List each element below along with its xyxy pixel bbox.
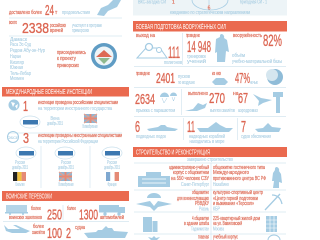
stat: 67 airfields <box>233 90 258 114</box>
stat: 2401 launches: пусков <box>178 74 190 80</box>
text: apartment house: Москва <box>213 226 224 232</box>
stat: 7 support ships: судов обеспечения <box>241 134 271 140</box>
text: date: Россия <box>15 160 25 166</box>
text: sports centre: «Центр горной подготовки <box>213 195 258 202</box>
text: admin building: корпус с общежитием <box>173 170 209 176</box>
stat: 82%: учебно-материальной базы <box>232 58 282 65</box>
flag: France <box>106 172 119 181</box>
icon: wings <box>148 236 160 240</box>
text: joined project <box>57 50 86 69</box>
heading: combat training: БОЕВАЯ ПОДГОТОВКА ВООРУЖЁННЫХ СИЛ <box>136 23 226 31</box>
icon: OSCE badge: ОБСЕ <box>7 135 19 140</box>
icon: train <box>5 205 28 215</box>
icon: submarine <box>147 125 178 131</box>
stat: 11 ships: надводных кораблей <box>189 133 225 140</box>
text: airborne hostel: РВВДКУ <box>195 201 210 207</box>
panel: military transport <box>3 205 129 240</box>
text: sports centre: и выживания «Терскол» <box>213 201 254 207</box>
text: range trips: выход на <box>136 33 155 39</box>
text: date: декабрь 2015 <box>58 165 74 171</box>
text: date: декабрь 2015 <box>47 121 63 127</box>
stat: 67 airfields: аэродромах <box>238 108 258 114</box>
panel: strategic band <box>133 0 287 16</box>
text: inspection description <box>38 99 118 112</box>
text: hostel: противоминного центра ВС РФ <box>213 176 266 182</box>
icon: emblem <box>91 43 117 69</box>
stat: doctors: российских <box>50 22 66 29</box>
icon: map fragment <box>97 0 121 16</box>
text: hostel <box>213 165 266 188</box>
text: joined project: присоединились <box>57 50 86 56</box>
stat: 2401 launches: по воздушно <box>178 80 195 86</box>
icon: ice axe <box>265 194 282 210</box>
stat: doctors: 2338 <box>22 20 49 37</box>
heading: international inspections <box>2 87 129 96</box>
stat: planes <box>32 224 62 240</box>
text: airborne hostel: Рязань <box>199 206 209 212</box>
icon: arc: 6 <box>208 6 211 12</box>
text: sports centre: КБР <box>213 206 220 212</box>
icon: warship <box>197 122 233 132</box>
list of cities: Кизляр <box>10 60 24 66</box>
heading: military transport <box>2 191 129 201</box>
text: date <box>12 160 28 171</box>
stat: trucks: более <box>67 206 76 212</box>
stat: doctors: всего <box>9 20 17 26</box>
list of cities: Редом Абу-эн-Нур <box>10 48 45 54</box>
text: four hostels: 4 общежития <box>192 216 209 222</box>
stat: trains: 250 <box>47 206 62 224</box>
stat: 82%: вооружённость <box>233 33 262 39</box>
icon: deminer <box>272 167 282 188</box>
stat: 47%: 47% <box>235 70 250 87</box>
text: airborne hostel: общежитие <box>192 190 209 196</box>
stat: 14948 exercises: тренировок <box>187 54 207 60</box>
heading: construction <box>133 147 287 157</box>
text: inspection description: инспекции проведены иностранными специалистами <box>38 133 122 139</box>
stat: 47%: ночью <box>250 80 258 86</box>
stat: food delivered <box>9 2 90 19</box>
list of cities: Наран <box>10 54 21 60</box>
text: four hostels <box>184 216 209 232</box>
flag: Belgium <box>13 172 26 181</box>
text: inspection description <box>38 133 122 145</box>
stat: 6 submarines <box>135 119 167 140</box>
stat: ships <box>66 225 85 240</box>
stat: 6 submarines: подводных лодок <box>136 134 167 140</box>
text: four hostels: Таджикистан <box>191 226 209 232</box>
heading: construction: СТРОИТЕЛЬСТВО И РЕКОНСТРУКЦИЯ <box>136 150 210 156</box>
text: admin building: на 550 человек СЗУ <box>171 176 210 182</box>
stat: 82%: 82% <box>263 31 282 50</box>
icon: building block <box>143 217 158 232</box>
icon: truck <box>99 205 125 216</box>
stat: trucks: 1300 <box>79 206 98 224</box>
text: date <box>47 116 63 127</box>
text: inspection description: на территории Российской Федерации <box>38 138 98 145</box>
icon: jet and tower <box>253 92 283 113</box>
text: four hostels: в здании штаба <box>184 221 209 227</box>
panel: combat training <box>134 31 286 145</box>
text: joined project: приморских <box>57 63 79 69</box>
stat: food delivered: продовольствия <box>62 10 90 16</box>
text: hostel: Международного <box>213 170 249 176</box>
text: directions: ежедневно по стратегическим направлениям <box>170 10 250 16</box>
list of cities: Дамаск <box>10 37 28 43</box>
panel: humanitarian aid <box>9 0 122 82</box>
stat: 11 ships <box>187 119 225 140</box>
text: at sea: находились в море <box>190 139 225 145</box>
stat: 67 airfields: на <box>233 91 239 97</box>
text: admin building: Санкт-Петербург <box>181 182 209 188</box>
heading: military transport: ВОИНСКИЕ ПЕРЕВОЗКИ <box>6 194 52 200</box>
stat: food delivered: 24 <box>45 2 54 19</box>
stat: 270 sorties <box>188 90 235 114</box>
text: joined project: к проекту <box>57 56 76 62</box>
panel: inspections abroad <box>8 98 118 130</box>
text: inspection description: на территории иностранного государства <box>38 106 112 112</box>
panel: inspections in Russia <box>7 130 122 188</box>
labels: countries <box>16 182 117 188</box>
list of cities: Мехмен <box>10 76 24 82</box>
list of cities <box>10 37 45 82</box>
icon: soldier <box>215 34 229 62</box>
stat: 111 ranges: 111 <box>168 43 180 62</box>
labels: countries: Бельгия <box>16 182 25 188</box>
stat: 2634 jumps: 2634 <box>135 91 155 108</box>
stat: 2401 launches: проведено <box>136 71 150 77</box>
icon: jet <box>185 103 207 111</box>
icon: parachutes <box>160 92 177 103</box>
flag: UK <box>84 114 97 123</box>
icon: building <box>138 172 170 187</box>
icon: tank <box>212 71 228 85</box>
number: 3: 3 <box>23 130 29 147</box>
text: completed: завершено строительство <box>187 157 233 163</box>
text: apartment house: 225-квартирный жилой дом <box>213 215 260 222</box>
text: sports centre <box>213 189 263 212</box>
panel: inspections abroad: Великобритания <box>82 124 98 130</box>
stat: doctors: участвуют в програме <box>72 23 102 29</box>
icon: OSCE <box>55 147 75 159</box>
stat: 2634 jumps <box>135 91 175 114</box>
text: airborne hostel <box>177 190 210 212</box>
number: 1: 1 <box>23 98 28 115</box>
stat: 14948 exercises: учений <box>187 58 206 65</box>
text: date: Россия <box>61 160 71 166</box>
text: admin building <box>169 164 210 188</box>
text: date: декабрь 2015 <box>104 165 120 171</box>
heading: combat training <box>133 21 287 32</box>
text: apartment house <box>213 215 260 232</box>
icon: bottom arc <box>268 235 280 240</box>
stat: ships: судна <box>75 225 85 231</box>
text: inspection description: инспекция проведена российскими специалистами <box>38 99 118 106</box>
stat: 14948 exercises: проведено <box>186 33 200 39</box>
stat: 14948 exercises <box>186 33 211 65</box>
text: apartment house: на ул. Вавиловский <box>213 220 242 227</box>
text: date: Вена <box>50 116 60 122</box>
heading: international inspections: МЕЖДУНАРОДНЫЕ ВОЕННЫЕ ИНСПЕКЦИИ <box>6 89 92 96</box>
icon: ship <box>84 226 128 238</box>
stat: trucks <box>67 206 124 224</box>
labels: countries: Великобритания <box>58 182 74 188</box>
panel: construction <box>134 157 286 240</box>
stat: 111 ranges <box>164 43 182 66</box>
stat: doctors <box>9 20 102 37</box>
text: admin building: административно-учебный <box>169 164 209 171</box>
stat: 2401 launches <box>136 70 195 87</box>
icon: apartment house <box>266 216 277 232</box>
icon: OSCE <box>20 116 40 128</box>
text: date: декабрь 2015 <box>12 165 28 171</box>
text: hostel: Нахабино <box>213 182 229 188</box>
stat: trains <box>9 206 62 224</box>
stat: 7 support ships <box>241 119 271 140</box>
stat: 82% <box>232 31 282 65</box>
stat: 2401 launches: 2401 <box>156 70 175 87</box>
flag: UK <box>59 172 72 181</box>
stat: 270 sorties: вылетов самолётов <box>210 108 235 114</box>
stat: trucks: автомобилей <box>100 214 124 221</box>
stat: trains: более <box>31 206 41 212</box>
stat: 270 sorties: выполнено <box>188 91 208 97</box>
icon: support ship <box>255 123 281 132</box>
stat: planes: самолётов <box>32 230 45 236</box>
text: date <box>104 160 120 171</box>
stat: planes: более <box>33 224 44 230</box>
icon: map pins <box>137 44 167 58</box>
text: hostel: общежитие гостиничного типа <box>213 165 265 171</box>
icon: globe <box>8 100 20 110</box>
panel: combat training: 14 948 <box>187 39 211 56</box>
stat: 82%: объём <box>232 53 245 59</box>
stat: food delivered: доставлено более <box>9 10 42 16</box>
icon: OSCE <box>102 147 122 159</box>
stat: 2634 jumps: прыжка с парашютом <box>136 108 175 114</box>
icon: night circle <box>266 69 283 85</box>
stat: food delivered: т <box>55 10 58 16</box>
stat: 111 ranges: полигонов <box>164 60 182 66</box>
icon: tank: из них <box>212 71 221 77</box>
stat: 11 ships: 11 <box>187 119 195 136</box>
stat: 7 support ships: 7 <box>241 119 246 136</box>
stat: trains: воинских эшелонов <box>9 215 42 221</box>
list of cities: Тель-Лебар <box>10 71 31 77</box>
text: sports centre: культурно-спортивный центр <box>213 189 263 196</box>
list of cities: Южная <box>10 65 23 71</box>
icon: cargo plane <box>4 225 30 233</box>
text: airborne hostel: для военнослужащих <box>177 196 209 202</box>
icon: arc <box>192 0 228 12</box>
stat: doctors: врачей <box>50 27 63 34</box>
stat: 6 submarines: 6 <box>135 119 140 136</box>
stat: 67 airfields: 67 <box>238 90 248 107</box>
text: date: Россия <box>107 160 117 166</box>
panel: inspections in Russia: Франция <box>108 182 117 188</box>
stat: 270 sorties: 270 <box>209 90 225 107</box>
list of cities: Раса Эс-Суд <box>10 42 31 48</box>
icon: OSCE <box>16 147 36 159</box>
text: date <box>58 160 74 171</box>
stat: doctors: приморских <box>72 28 89 34</box>
icon: airborne emblem <box>136 193 172 211</box>
